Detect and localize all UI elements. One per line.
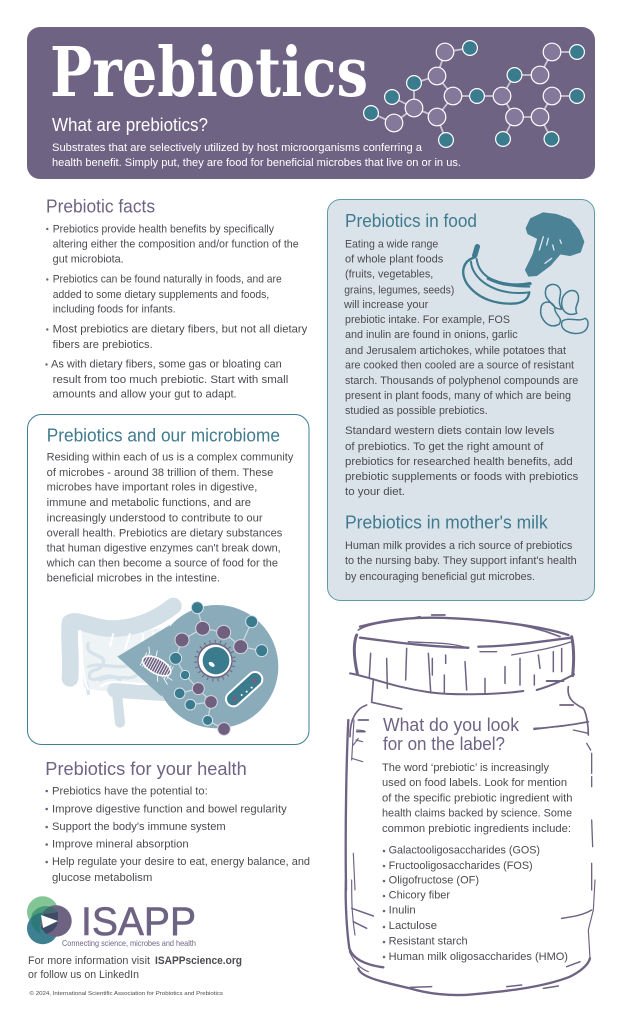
food text: are cooked then cooled are a source of resistant bbox=[345, 360, 574, 372]
heading: Prebiotics in mother's milk bbox=[345, 512, 548, 533]
heading: for on the label? bbox=[383, 734, 505, 754]
food text: and Jerusalem artichokes, while potatoes that bbox=[345, 345, 566, 357]
section: prebiotics for your health bbox=[45, 758, 310, 884]
definition text bbox=[52, 142, 461, 169]
title: Prebiotics bbox=[50, 33, 368, 113]
food text: will increase your bbox=[343, 299, 429, 311]
body text: Residing within each of us is a complex community bbox=[47, 452, 294, 464]
panel: prebiotics in food and mother's milk bbox=[328, 200, 594, 600]
food text: prebiotic supplements or foods with prebiotics bbox=[345, 471, 578, 483]
label text: health claims backed by science. Some bbox=[382, 808, 572, 820]
body text: that human digestive enzymes can't break down, bbox=[47, 543, 281, 555]
icon: rod bacterium bbox=[232, 678, 257, 702]
label text: of the specific prebiotic ingredient with bbox=[382, 792, 573, 804]
ingredient list: Oligofructose (OF) bbox=[389, 875, 479, 887]
food text: prebiotic intake. For example, FOS bbox=[345, 314, 510, 326]
heading: Prebiotics and our microbiome bbox=[47, 425, 280, 446]
ingredient list: Lactulose bbox=[389, 920, 437, 932]
subtitle: What are prebiotics? bbox=[52, 115, 208, 135]
food text: Standard western diets contain low levels bbox=[345, 425, 554, 437]
body text: overall health. Prebiotics are dietary substances bbox=[47, 528, 282, 540]
icon: molecule chains bbox=[170, 602, 268, 735]
text: what to look for on the label bbox=[382, 715, 573, 963]
contact information: or follow us on LinkedIn bbox=[28, 969, 139, 981]
jar lid bbox=[350, 615, 588, 737]
ingredient list: Chicory fiber bbox=[389, 889, 450, 901]
body text bbox=[46, 452, 294, 585]
copyright: © 2024, International Scientific Association for Probiotics and Prebiotics bbox=[30, 990, 223, 997]
bullet list: Improve digestive function and bowel regularity bbox=[52, 803, 287, 815]
label text: The word ‘prebiotic’ is increasingly bbox=[382, 762, 550, 774]
label text: used on food labels. Look for mention bbox=[382, 777, 567, 789]
ingredient list: Resistant starch bbox=[389, 936, 468, 948]
panel: prebiotics and our microbiome bbox=[28, 414, 309, 744]
milk text bbox=[345, 540, 577, 583]
icon: broccoli bbox=[526, 213, 583, 276]
milk text: by encouraging beneficial gut microbes. bbox=[345, 571, 535, 583]
food text: prebiotics for researched health benefits, add bbox=[345, 456, 573, 468]
food icons bbox=[463, 247, 588, 333]
bullet list: Support the body's immune system bbox=[52, 821, 226, 833]
icon: protozoa bbox=[136, 646, 181, 687]
milk text: Human milk provides a rich source of prebiotics bbox=[345, 540, 572, 552]
label text bbox=[382, 762, 573, 835]
logo: ISAPP bbox=[27, 896, 196, 948]
label text: common prebiotic ingredients include: bbox=[382, 823, 571, 835]
bullet list: fibers are prebiotics. bbox=[53, 339, 153, 351]
heading: What do you look bbox=[383, 715, 520, 735]
bullet list bbox=[45, 223, 308, 401]
food text: starch. Thousands of polyphenol compounds are bbox=[345, 375, 578, 387]
wordmark: ISAPP bbox=[81, 900, 196, 944]
milk text: to the nursing baby. They support infant's health bbox=[345, 555, 577, 567]
section: prebiotic facts bbox=[45, 197, 308, 401]
bullet list bbox=[45, 785, 310, 884]
body text: beneficial microbes in the intestine. bbox=[47, 573, 220, 585]
bullet list: Prebiotics provide health benefits by specifically bbox=[53, 223, 275, 235]
bullet list: result from too much prebiotic. Start with small bbox=[53, 374, 288, 386]
ingredient list: Fructooligosaccharides (FOS) bbox=[389, 860, 533, 872]
icon: bananas bbox=[463, 247, 530, 304]
body text: immune and metabolic functions, and are bbox=[47, 497, 251, 509]
contact information: ISAPPscience.org bbox=[155, 955, 242, 967]
body text: increasingly understood to contribute to our bbox=[47, 513, 263, 525]
bullet list: amounts and allow your gut to adapt. bbox=[53, 389, 237, 401]
body text: which can then become a source of food for the bbox=[46, 558, 278, 570]
tagline: Connecting science, microbes and health bbox=[62, 938, 196, 948]
bullet list: glucose metabolism bbox=[52, 872, 152, 884]
heading: Prebiotics in food bbox=[345, 210, 477, 231]
food text: and inulin are found in onions, garlic bbox=[345, 329, 518, 341]
ingredient list: Inulin bbox=[389, 905, 416, 917]
food text: (fruits, vegetables, bbox=[345, 268, 433, 280]
bullet list: Most prebiotics are dietary fibers, but not all dietary bbox=[53, 324, 308, 336]
bullet list: Help regulate your desire to eat, energy balance, and bbox=[52, 856, 310, 868]
icon: beans bbox=[541, 284, 588, 333]
contact information bbox=[28, 955, 242, 981]
bullet list: Prebiotics have the potential to: bbox=[52, 785, 208, 797]
illustration: jar bbox=[346, 615, 595, 995]
body text: microbes have important roles in digestive, bbox=[47, 482, 257, 494]
food text: of prebiotics. To get the right amount of bbox=[345, 441, 543, 453]
header banner bbox=[27, 27, 595, 179]
jar body base bbox=[346, 880, 595, 995]
definition text: Substrates that are selectively utilized by host microorganisms conferring a bbox=[52, 142, 422, 154]
food text: studied as possible prebiotics. bbox=[345, 405, 488, 417]
ingredient list: Galactooligosaccharides (GOS) bbox=[389, 845, 540, 857]
food text bbox=[343, 238, 578, 498]
ingredient list bbox=[383, 845, 568, 963]
bullet list: including foods for infants. bbox=[53, 304, 176, 316]
bullet list: Improve mineral absorption bbox=[52, 839, 189, 851]
bullet list: gut microbiota. bbox=[53, 254, 124, 266]
food text: of whole plant foods bbox=[345, 253, 443, 265]
ingredient list: Human milk oligosaccharides (HMO) bbox=[389, 951, 568, 963]
body text: of microbes - around 38 trillion of them. These bbox=[47, 467, 273, 479]
icon: overlapping circles bbox=[27, 896, 72, 944]
bullet list: altering either the composition and/or function of the bbox=[53, 239, 299, 251]
magnifier: circle view bbox=[117, 605, 278, 728]
icon: prebiotic molecule chains bbox=[364, 41, 584, 147]
food text: Eating a wide range bbox=[345, 238, 438, 250]
bullet list: Prebiotics can be found naturally in foods, and are bbox=[53, 274, 282, 286]
heading: Prebiotic facts bbox=[46, 197, 155, 217]
bullet list: added to some dietary supplements and foods, bbox=[53, 289, 269, 301]
food text: grains, legumes, seeds) bbox=[344, 284, 454, 296]
jar body sides bbox=[346, 720, 593, 890]
illustration: gut and microbes bbox=[70, 602, 278, 735]
bullet list: As with dietary fibers, some gas or bloating can bbox=[51, 359, 282, 371]
heading bbox=[383, 715, 520, 754]
icon: intestine bbox=[70, 606, 173, 723]
contact information: For more information visit bbox=[28, 955, 150, 967]
food text: present in plant foods, many of which are being bbox=[345, 390, 571, 402]
icon: virus bbox=[196, 641, 234, 680]
heading: Prebiotics for your health bbox=[45, 758, 247, 779]
food text: to your diet. bbox=[345, 486, 405, 498]
definition text: health benefit. Simply put, they are food for beneficial microbes that live on or in us. bbox=[52, 157, 461, 169]
